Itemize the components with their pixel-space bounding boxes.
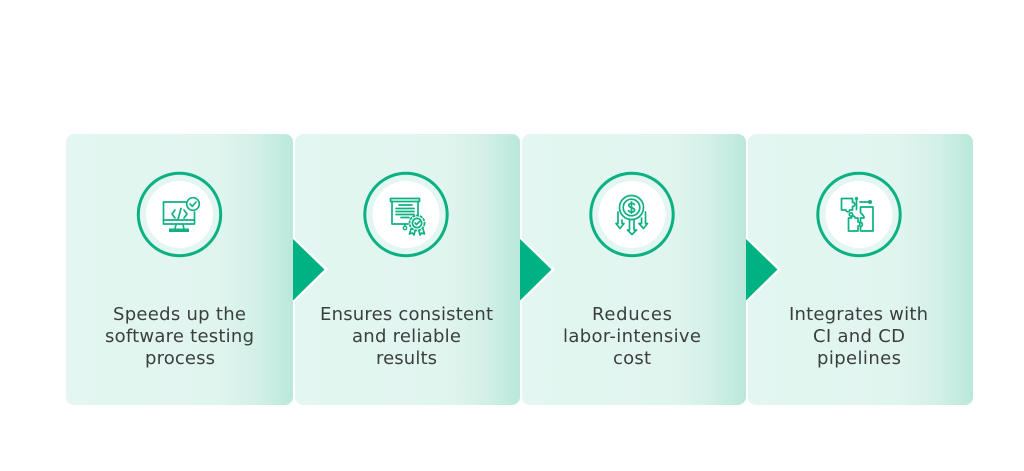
- panel: reduces cost: [522, 134, 746, 405]
- text: speeds up: software testing: [105, 326, 254, 347]
- text: reduces: cost: [613, 348, 651, 369]
- icon: dollar coin with down arrows: [591, 173, 673, 256]
- arrow: step 1 to 2: [293, 236, 328, 304]
- text: speeds up: process: [145, 348, 215, 369]
- text: integrates: CI and CD: [813, 326, 905, 347]
- panel: ensures consistent: [295, 134, 520, 405]
- text: reduces: Reduces: [592, 304, 672, 325]
- text: reduces: labor-intensive: [563, 326, 701, 347]
- text: integrates: Integrates with: [789, 304, 928, 325]
- text: integrates: [789, 304, 928, 369]
- text: ensures consistent: Ensures consistent: [320, 304, 493, 325]
- panel: integrates: [748, 134, 973, 405]
- text: ensures consistent: [320, 304, 493, 369]
- panel: speeds up testing: [66, 134, 293, 405]
- text: reduces: [563, 304, 701, 369]
- text: integrates: pipelines: [817, 348, 901, 369]
- icon: puzzle pieces: [818, 173, 900, 256]
- arrow: step 2 to 3: [520, 236, 555, 304]
- text: ensures consistent: and reliable: [352, 326, 461, 347]
- arrow: step 3 to 4: [746, 236, 781, 304]
- text: ensures consistent: results: [376, 348, 437, 369]
- text: speeds up: Speeds up the: [113, 304, 246, 325]
- icon: presentation with award: [365, 173, 447, 256]
- text: speeds up: [105, 304, 254, 369]
- icon: monitor with code: [138, 173, 221, 256]
